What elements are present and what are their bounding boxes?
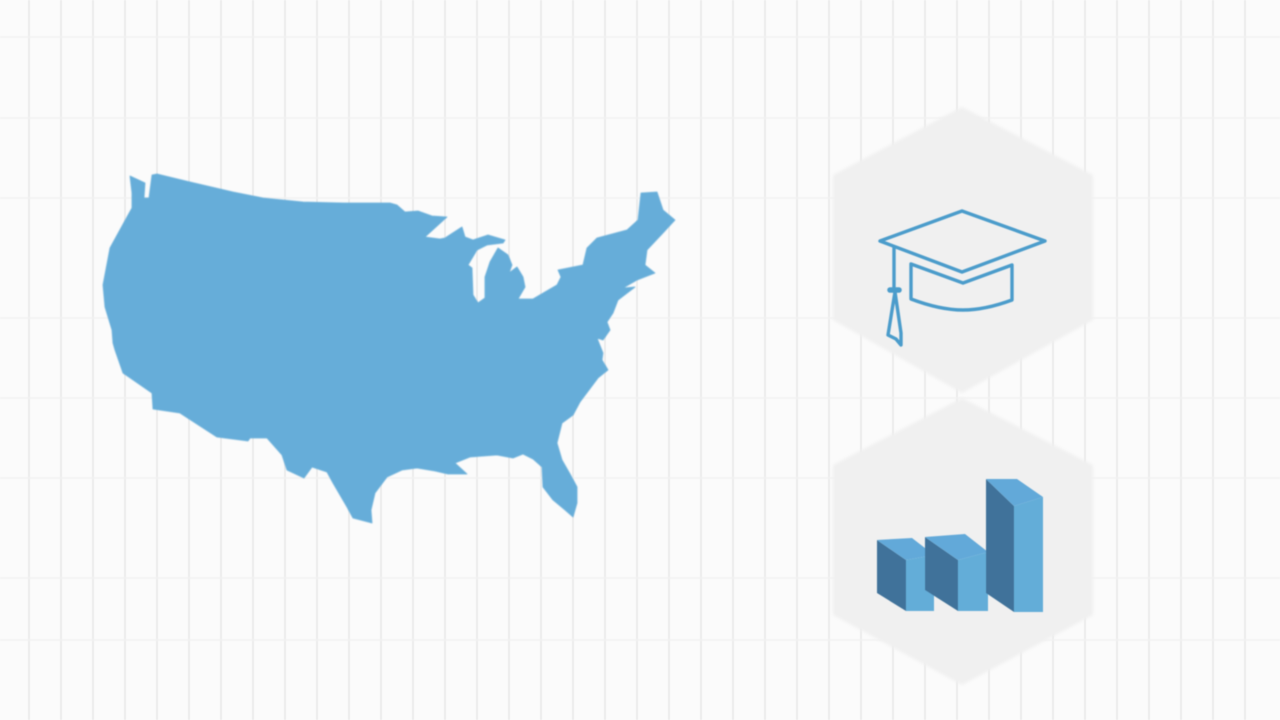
panel: growth hexagon	[833, 398, 1093, 685]
map: United States silhouette	[103, 174, 675, 523]
icon: 3D bar chart	[877, 479, 1043, 612]
panel: education hexagon	[833, 107, 1093, 393]
icon: graduation cap	[880, 211, 1045, 345]
